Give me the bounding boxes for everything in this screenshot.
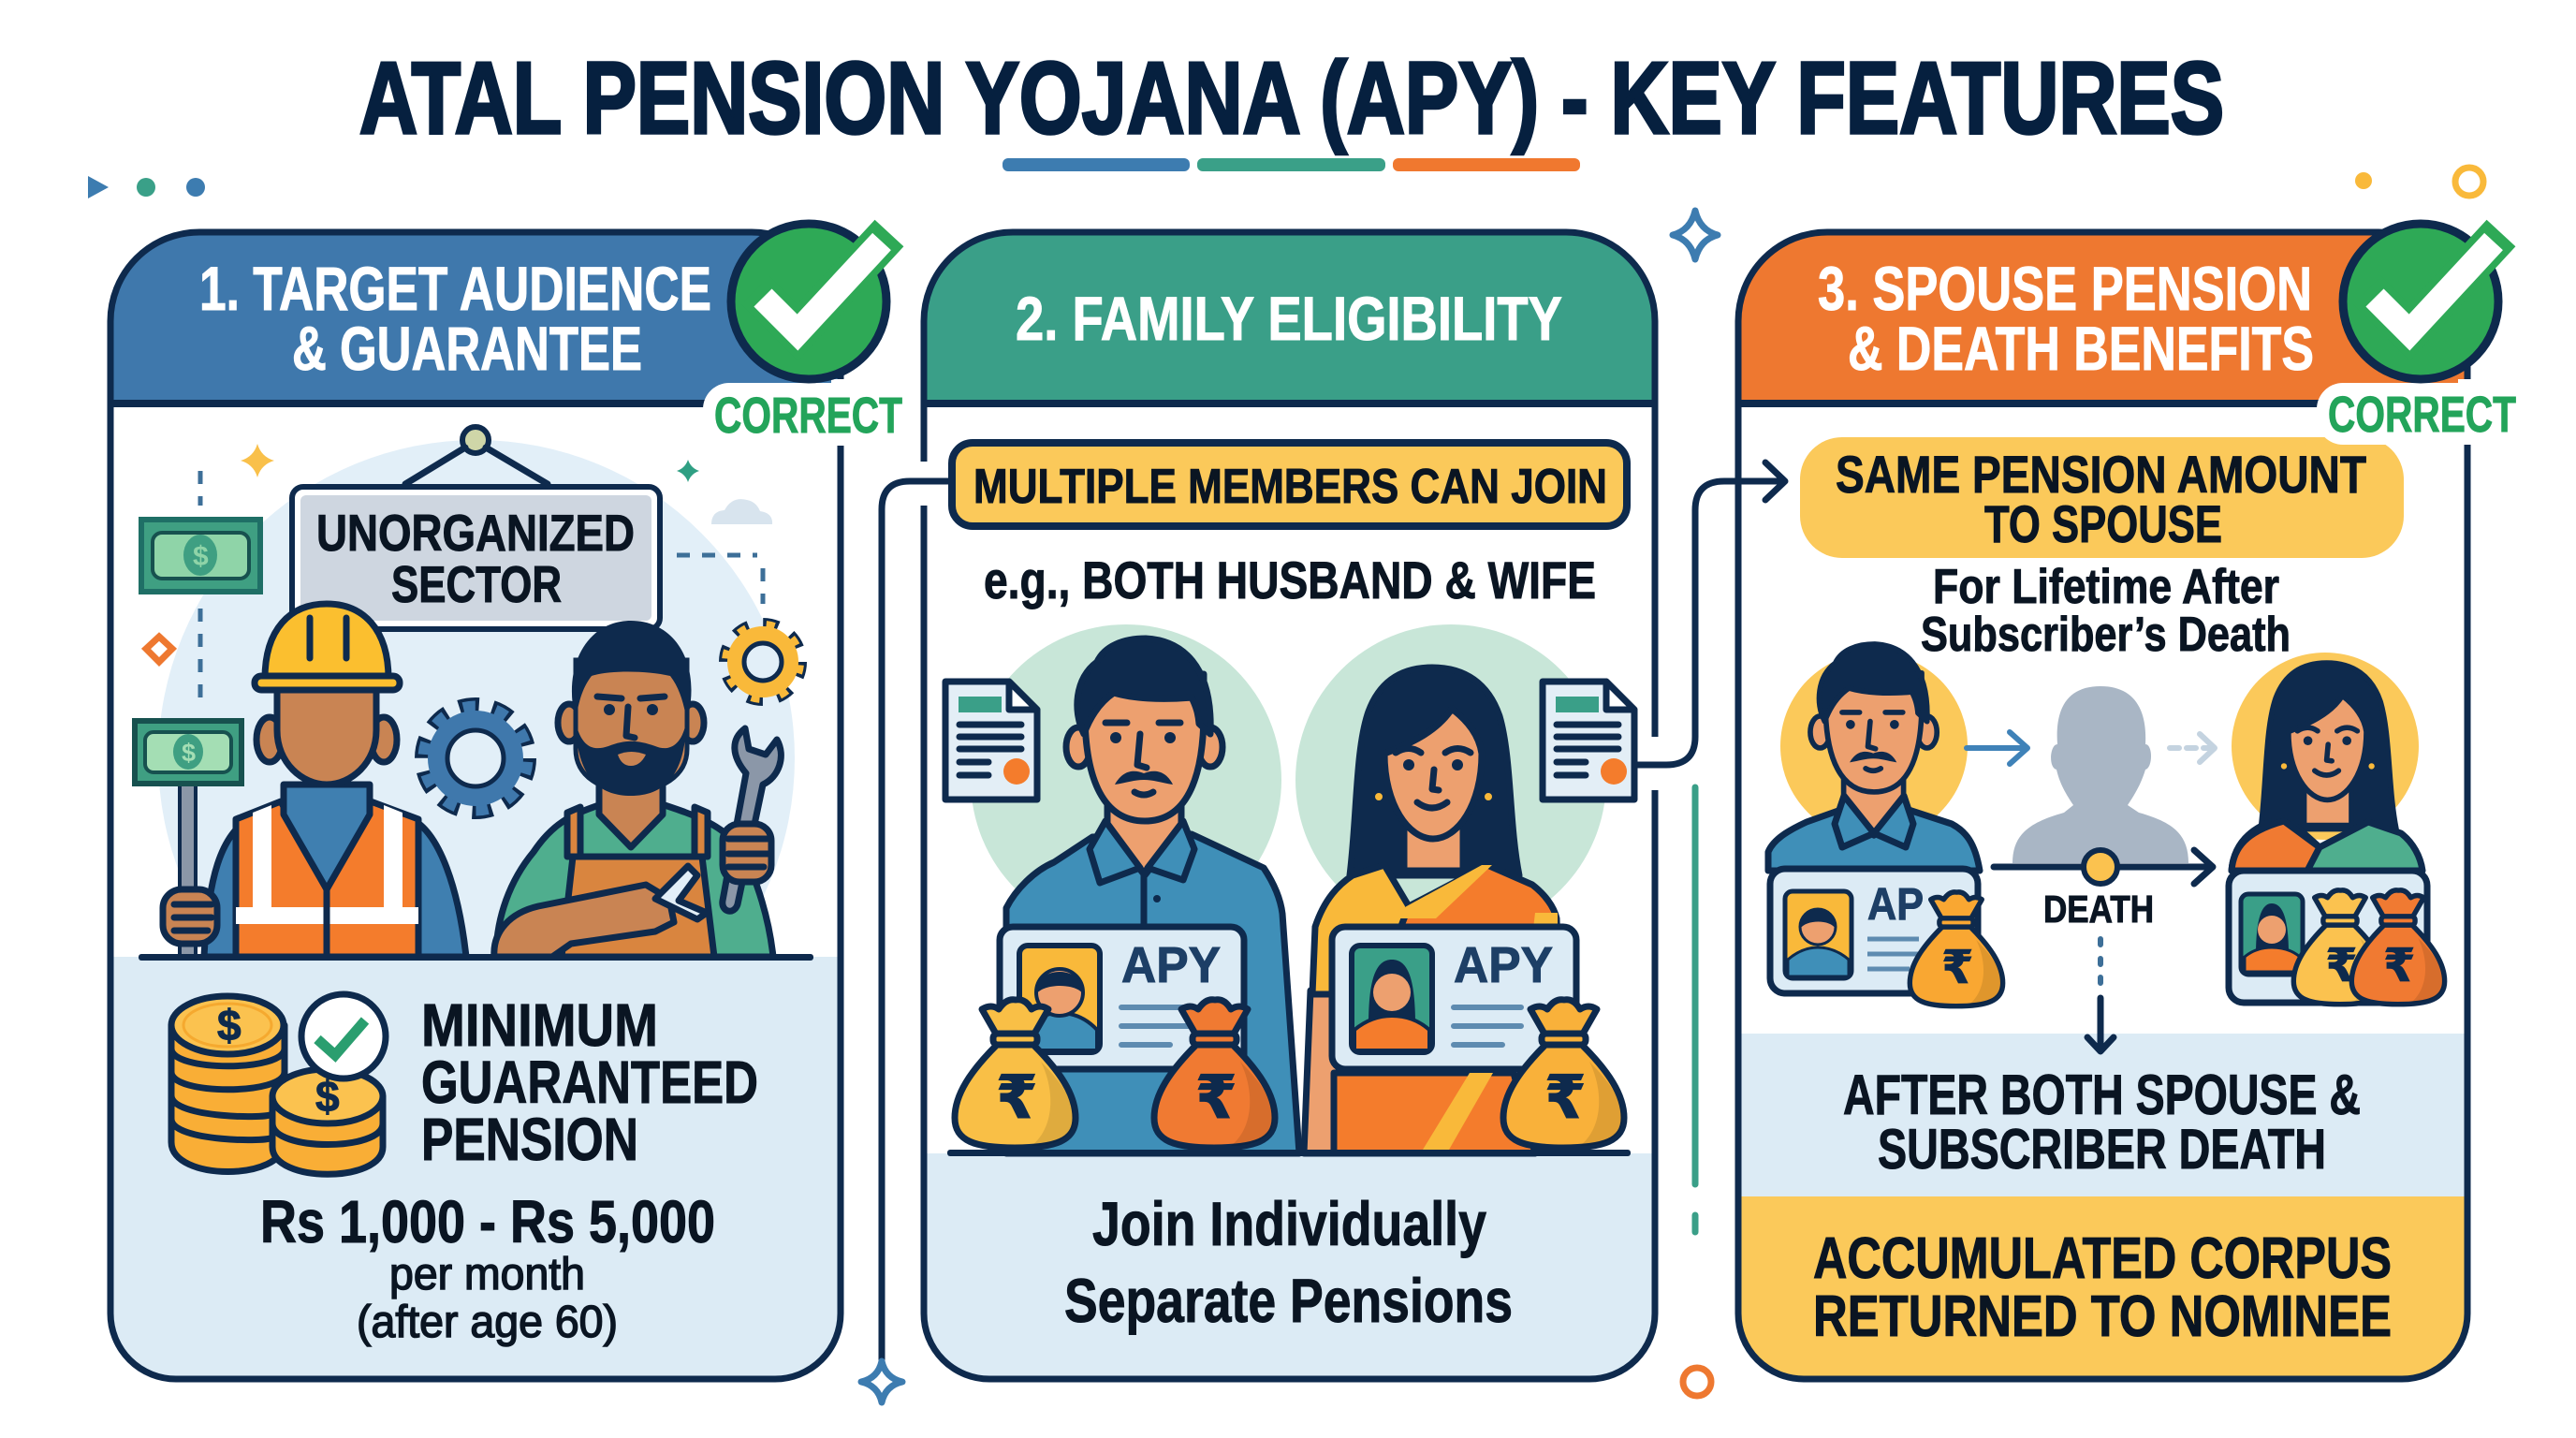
arrow: blue [1967,732,2027,764]
man figure [1006,638,1299,1153]
silhouette: deceased [2012,686,2188,863]
text: minimum guaranteed pension [421,991,758,1173]
icon: green sparkle [677,460,699,482]
panel 3 outline [1738,232,2467,1379]
icon: banknote: $ [193,541,209,572]
panel 3 heading: & DEATH BENEFITS [1848,314,2314,383]
icon: money bag on subscriber card: ₹ [1941,942,1973,993]
text: accumulated corpus returned to nominee [1813,1226,2392,1349]
yellow circles [1780,653,2419,840]
decoration: bottom ring [1683,1368,1711,1396]
callout: same pension amount [1800,437,2404,558]
panel 2 heading: 2. FAMILY ELIGIBILITY [1016,284,1562,353]
icon: yellow money bag on spouse card [2293,890,2387,1005]
badge: correct panel 1 [703,224,918,446]
text: for lifetime after subscriber's death [1921,560,2291,662]
icon: orange money bag on spouse card: ₹ [2383,940,2415,991]
text: after both spouse and subscriber death: SUBSCRIBER DEATH [1878,1118,2326,1181]
badge: correct panel 3 [2317,224,2532,445]
text: after both spouse and subscriber death: AFTER BOTH SPOUSE & [1843,1064,2361,1126]
decoration: green vertical line [1692,787,1698,1232]
badge: correct panel 3: CORRECT [2328,387,2516,443]
text: separate pensions: Separate Pensions [1064,1266,1513,1335]
card: subscriber APY [1770,869,1978,993]
spouse figure [2232,663,2422,871]
banknote on pole [135,721,242,957]
worker with wrench [494,621,781,957]
icon: money bag on subscriber card [1910,892,2003,1006]
icon: coin stacks [171,994,386,1174]
text: minimum guaranteed pension: GUARANTEED [421,1049,758,1116]
panel 3 header band [1732,225,2481,407]
panel 2 outline [924,232,1655,1379]
decoration: top star [1673,211,1718,259]
panel 3 yellow footer background [1732,1196,2481,1387]
arrow head: faded [2200,734,2215,762]
card: subscriber APY: AP [1867,880,1924,930]
connector: right from document to arrow [1634,462,1785,790]
text: accumulated corpus returned to nominee: RETURNED TO NOMINEE [1813,1284,2392,1349]
panel 1 heading: 1. TARGET AUDIENCE [199,254,711,323]
icon: document left [945,682,1037,800]
text: both husband and wife: e.g., BOTH HUSBAND & WIFE [984,550,1596,609]
badge: correct panel 1: CORRECT [714,388,902,444]
icon: orange diamond [146,637,172,662]
panel 2 header band [917,225,1666,407]
card: APY right: APY [1454,937,1553,993]
sign: unorganized sector: UNORGANIZED [316,504,635,562]
text: per month after age 60 [357,1250,618,1347]
timeline: death: DEATH [2043,888,2154,931]
banknote on pole: $ [182,739,196,767]
callout: multiple members [952,443,1627,526]
text: per month after age 60: (after age 60) [357,1298,618,1347]
sign: unorganized sector [292,427,660,629]
card: APY left [1000,927,1244,1069]
text: minimum guaranteed pension: MINIMUM [421,991,658,1059]
ground line [139,954,813,961]
icon: money bag 2 [1154,1000,1275,1148]
callout: same pension amount: TO SPOUSE [1984,494,2222,553]
decoration: top right markers [2355,168,2483,196]
panel: family eligibility [917,225,1666,1387]
callout: multiple members: MULTIPLE MEMBERS CAN JOIN [973,460,1607,514]
woman figure [1304,668,1559,1153]
text: pension amount: Rs 1,000 - Rs 5,000 [260,1188,715,1255]
dashed connectors [200,471,763,701]
panel 2 lower section background [917,1153,1666,1387]
panel: spouse pension and death benefits [1732,225,2481,1387]
worker with helmet [204,604,466,957]
icon: money bag 2: ₹ [1195,1064,1237,1131]
icon: cloud [711,499,772,524]
text: for lifetime after subscriber's death: For Lifetime After [1933,560,2279,614]
icon: money bag 1: ₹ [996,1064,1038,1131]
icon: yellow gear [725,624,800,699]
card: spouse [2229,871,2427,1003]
icon: banknote [141,520,260,592]
decoration: top left markers [88,176,205,198]
panel 1 lower section background [103,957,852,1387]
timeline: death [1994,850,2213,983]
illustration: background circle [159,440,795,954]
icon: yellow sparkle [241,444,274,477]
sign: unorganized sector: SECTOR [391,555,562,613]
panel 3 heading [1818,254,2314,383]
subscriber figure [1768,644,1980,871]
panel 1 outline [110,232,841,1379]
panel 1 heading [199,254,711,383]
text: after both spouse and subscriber death [1843,1064,2361,1181]
text: for lifetime after subscriber's death: Subscriber’s Death [1921,608,2291,662]
panel 3 heading: 3. SPOUSE PENSION [1818,254,2312,323]
icon: orange money bag on spouse card [2351,890,2445,1005]
connector: left from callout to bottom diamond [861,462,950,1402]
panel 3 light section background [1732,1034,2481,1196]
icon: coin stacks: $ [315,1072,340,1121]
card: APY left: APY [1121,937,1221,993]
icon: large gear [423,706,528,811]
callout: same pension amount: SAME PENSION AMOUNT [1836,445,2366,504]
title underline bars [1003,158,1580,171]
arrow: down [2087,998,2114,1051]
text: join individually: Join Individually [1092,1189,1486,1258]
icon: document right [1543,682,1634,800]
icon: money bag 1 [955,1000,1076,1148]
text: accumulated corpus returned to nominee: ACCUMULATED CORPUS [1813,1226,2392,1291]
panel 1 heading: & GUARANTEE [292,314,642,383]
card: APY right [1332,927,1576,1069]
green background circles [971,624,1606,935]
icon: coin stacks: $ [217,1001,242,1049]
text: minimum guaranteed pension: PENSION [421,1106,638,1173]
text: per month after age 60: per month [389,1250,585,1299]
arrow: faded dashed [2170,745,2211,751]
panel: target audience and guarantee [103,225,852,1387]
ground line [947,1150,1631,1156]
icon: yellow money bag on spouse card: ₹ [2325,940,2357,991]
icon: money bag 3: ₹ [1544,1064,1587,1131]
icon: money bag 3 [1503,1000,1624,1148]
panel 1 header band [103,225,852,407]
